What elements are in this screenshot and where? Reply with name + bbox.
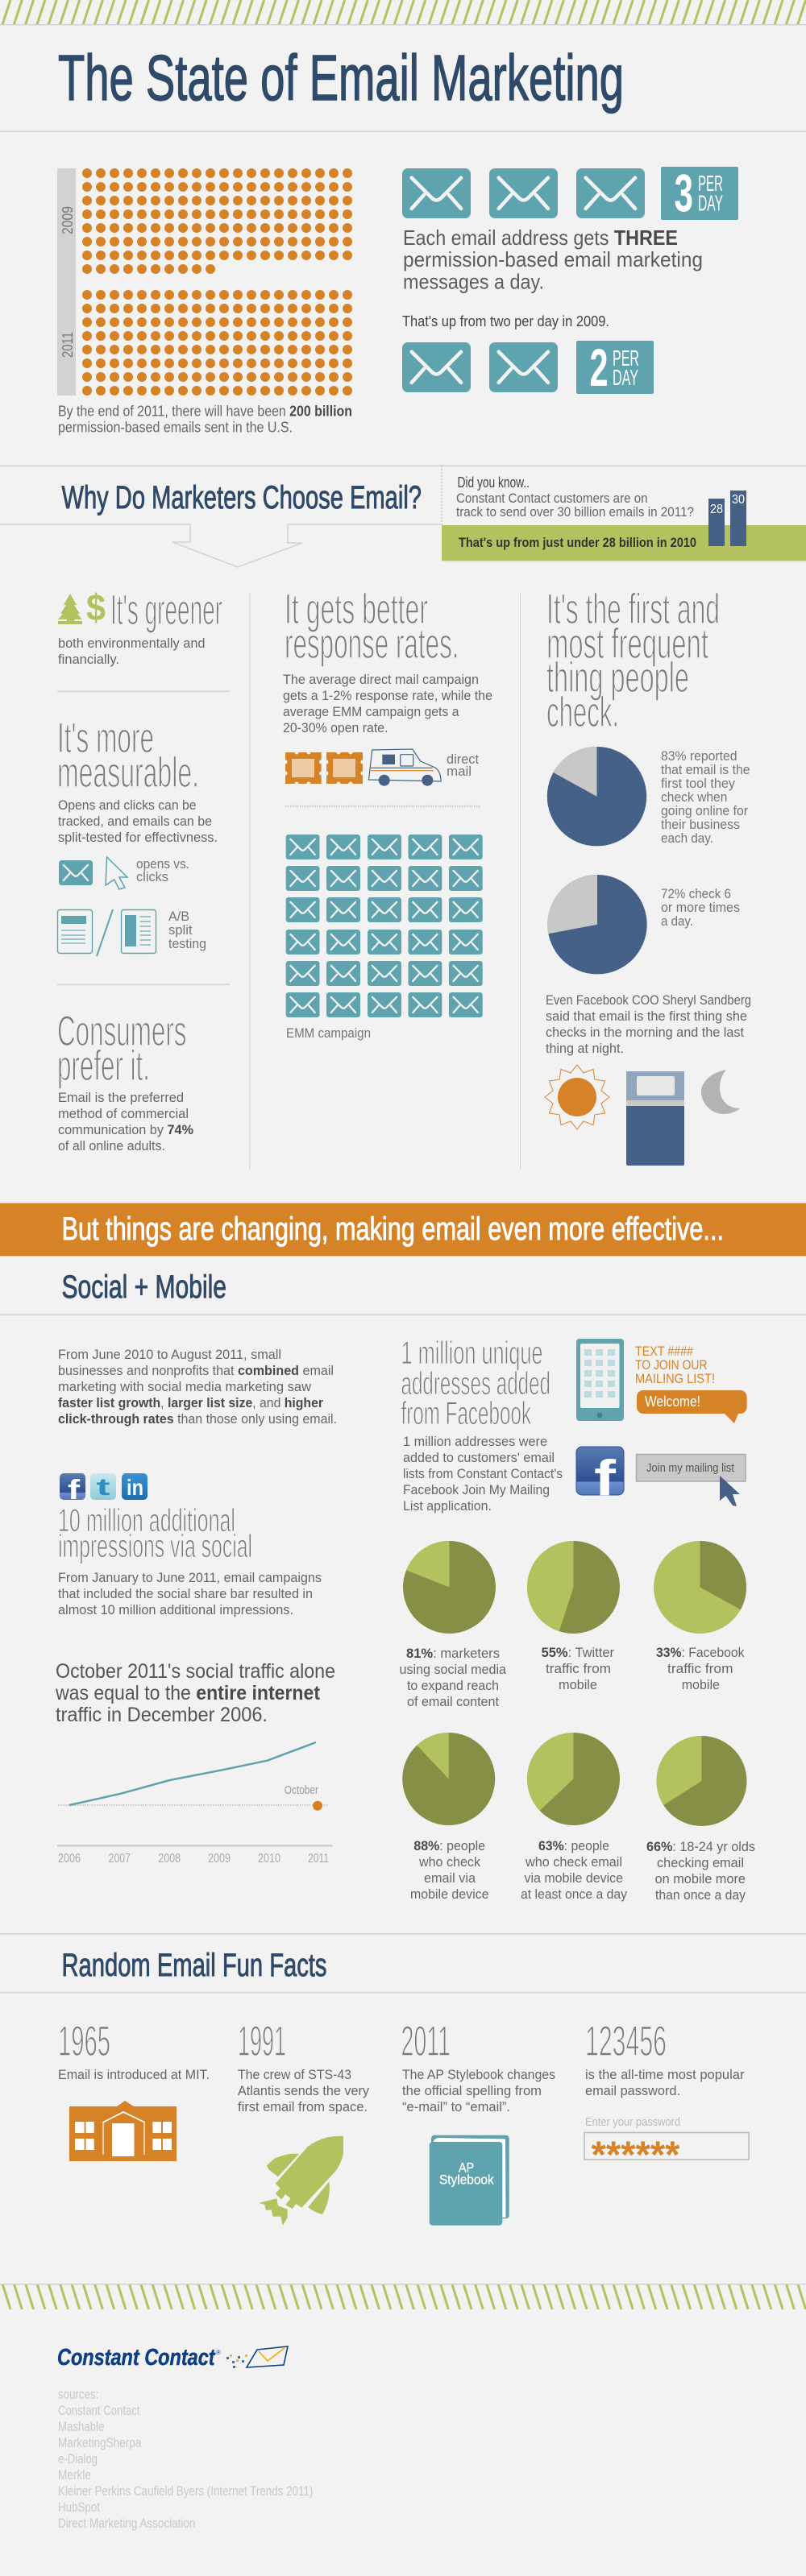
text: combined marketing: From June 2010 to August 2011, small bbox=[58, 1347, 281, 1362]
text: sources: Direct Marketing Association bbox=[58, 2516, 195, 2531]
label: direct mail: direct bbox=[447, 752, 479, 767]
text: response body: average EMM campaign gets a bbox=[283, 704, 459, 719]
icon: ap stylebook: Stylebook bbox=[439, 2172, 494, 2188]
label: 63%: at least once a day bbox=[521, 1886, 627, 1902]
label: 88%: mobile device bbox=[410, 1886, 488, 1902]
panel: fact 2011: “e-mail” to “email”. bbox=[402, 2099, 510, 2114]
label: direct mail bbox=[447, 752, 479, 779]
text: 1 million addresses body: Facebook Join My Mailing bbox=[403, 1482, 550, 1497]
text: text to join: TO JOIN OUR bbox=[635, 1357, 708, 1373]
panel: fact 2011: The AP Stylebook changes bbox=[402, 2067, 555, 2082]
text: measurable body bbox=[58, 797, 218, 845]
text: sources: MarketingSherpa bbox=[58, 2435, 142, 2450]
panel: fact 123456: email password. bbox=[585, 2083, 680, 2098]
text: measurable body: split-tested for effectivness. bbox=[58, 830, 218, 845]
heading: it's more measurable bbox=[57, 714, 199, 797]
text: response body: The average direct mail campaign bbox=[283, 672, 479, 687]
panel: fact 1991: first email from space. bbox=[238, 2099, 368, 2114]
heading: random email fun facts: Random Email Fun Facts bbox=[61, 1948, 327, 1983]
text: 83% reported: that email is the bbox=[661, 762, 750, 777]
label: 55%: mobile bbox=[559, 1677, 597, 1692]
panel: fact 123456: is the all-time most popular bbox=[585, 2067, 745, 2082]
text: sources: Merkle bbox=[58, 2467, 91, 2483]
heading: it's more measurable: measurable. bbox=[57, 749, 199, 797]
panel: fact 1991: The crew of STS-43 bbox=[238, 2067, 351, 2082]
text: consumers body: method of commercial bbox=[58, 1106, 189, 1121]
password input bbox=[584, 2133, 749, 2176]
text: 83% reported: first tool they bbox=[661, 776, 735, 791]
text: text to join: MAILING LIST! bbox=[635, 1371, 715, 1386]
panel: it's more measurable bbox=[57, 714, 218, 956]
text: response body: gets a 1-2% response rate, while the bbox=[283, 688, 492, 703]
label: 81% bbox=[400, 1646, 507, 1709]
text: sources: e-Dialog bbox=[58, 2451, 98, 2466]
label: 33%: mobile bbox=[682, 1677, 720, 1692]
icon: moon bbox=[701, 1070, 740, 1114]
label: 33%: traffic from bbox=[667, 1661, 733, 1676]
text: three messages a day: Each email address gets THREE bbox=[403, 226, 678, 250]
logo: constant contact: ® bbox=[216, 2349, 221, 2356]
label: opens vs clicks bbox=[136, 856, 189, 884]
icon: facebook bbox=[576, 1447, 624, 1506]
text: 1 million addresses body: 1 million addresses were bbox=[403, 1434, 547, 1449]
label: 63%: 63%: people bbox=[538, 1838, 609, 1853]
callout: did you know: 28 bbox=[710, 503, 723, 516]
icon: device bbox=[626, 1071, 684, 1166]
heading: 10 million impressions bbox=[58, 1503, 252, 1564]
heading: 10 million impressions: 10 million additional bbox=[58, 1503, 235, 1539]
label: 63% bbox=[521, 1838, 627, 1902]
panel: fact 1965: 1965 bbox=[58, 2018, 110, 2065]
pie chart: 63% once a day bbox=[527, 1733, 620, 1825]
label: emm campaign: EMM campaign bbox=[286, 1025, 371, 1041]
text: sheryl sandberg: checks in the morning and the last bbox=[546, 1025, 744, 1040]
callout: welcome bubble: Welcome! bbox=[645, 1394, 700, 1410]
label: 63%: via mobile device bbox=[524, 1870, 623, 1886]
text: 72% check bbox=[661, 886, 740, 929]
panel: fact 1965: Email is introduced at MIT. bbox=[58, 2067, 210, 2082]
label: 88% bbox=[410, 1838, 488, 1902]
text: three messages a day bbox=[403, 226, 703, 293]
text: sources: HubSpot bbox=[58, 2499, 100, 2515]
label: a/b split testing: testing bbox=[168, 936, 206, 951]
callout: did you know: Constant Contact customers are on bbox=[456, 491, 648, 506]
label: opens vs clicks: clicks bbox=[136, 869, 168, 884]
text: consumers body: Email is the preferred bbox=[58, 1090, 184, 1105]
text: social share bar: From January to June 2011, email campaigns bbox=[58, 1570, 322, 1585]
callout: did you know bbox=[442, 474, 806, 562]
heading: 10 million impressions: impressions via social bbox=[58, 1529, 252, 1564]
text: consumers body: of all online adults. bbox=[58, 1138, 165, 1153]
heading: better response rates bbox=[285, 586, 459, 668]
icons: social networks bbox=[60, 1473, 147, 1505]
icon: sun bbox=[545, 1065, 609, 1129]
text: 1 million addresses body: lists from Constant Contact's bbox=[403, 1466, 563, 1481]
pie chart: 55% twitter bbox=[527, 1541, 620, 1634]
line chart: social traffic 2006-2011 bbox=[57, 1742, 333, 1866]
label: 66%: 66%: 18-24 yr olds bbox=[646, 1839, 755, 1854]
text: 72% check: 72% check 6 bbox=[661, 886, 731, 901]
icon: rocket bbox=[259, 2136, 343, 2226]
icon: ap stylebook bbox=[430, 2135, 509, 2226]
panel: fact 2011: 2011 bbox=[401, 2018, 451, 2065]
heading: consumers prefer it: Consumers bbox=[57, 1008, 187, 1055]
panel: fact 123456 bbox=[584, 2018, 749, 2176]
caption: 200 billion: By the end of 2011, there will have been 200 billion bbox=[58, 403, 352, 419]
heading: first and most frequent bbox=[546, 586, 720, 736]
heading: 1 million addresses from facebook bbox=[401, 1336, 550, 1431]
text: measurable body: tracked, and emails can be bbox=[58, 814, 212, 829]
heading: social + mobile: Social + Mobile bbox=[61, 1269, 226, 1305]
caption: 200 billion bbox=[58, 403, 352, 435]
button: join my mailing list bbox=[637, 1455, 746, 1481]
label: 33%: 33%: Facebook bbox=[656, 1645, 745, 1660]
icon grid: emm campaign envelopes bbox=[286, 835, 483, 1017]
icon: mail truck bbox=[369, 749, 441, 786]
heading: why do marketers choose email: Why Do Marketers Choose Email? bbox=[61, 480, 422, 516]
heading: better response rates: It gets better bbox=[285, 586, 428, 633]
text: 83% reported: going online for bbox=[661, 803, 748, 818]
text: combined marketing: businesses and nonprofits that combined email bbox=[58, 1363, 334, 1378]
label: 88%: 88%: people bbox=[413, 1838, 485, 1853]
icons: social networks: f bbox=[68, 1475, 81, 1505]
text: sources: Constant Contact bbox=[58, 2403, 140, 2418]
password input: ****** bbox=[592, 2133, 680, 2176]
text: 1 million addresses body bbox=[403, 1434, 563, 1514]
text: consumers body bbox=[58, 1090, 193, 1153]
text: sources bbox=[58, 2387, 313, 2531]
icon: stamps bbox=[284, 751, 364, 786]
text: sources: sources: bbox=[58, 2387, 98, 2402]
callout: did you know: 30 bbox=[732, 493, 745, 507]
text: october 2011 traffic: October 2011's social traffic alone bbox=[56, 1660, 335, 1683]
text: sources: Mashable bbox=[58, 2419, 105, 2434]
text: social share bar: almost 10 million additional impressions. bbox=[58, 1602, 293, 1617]
icons: social networks: in bbox=[127, 1475, 143, 1500]
text: measurable body: Opens and clicks can be bbox=[58, 797, 197, 813]
label: 81%: 81%: marketers bbox=[406, 1646, 500, 1661]
pie chart: 66% 18-24 yr olds bbox=[656, 1736, 746, 1826]
text: greener body: both environmentally and bbox=[58, 636, 205, 651]
callout: did you know: That's up from just under 28 billion in 2010 bbox=[459, 535, 696, 550]
text: consumers body: communication by 74% bbox=[58, 1122, 193, 1137]
panel: fact 123456: 123456 bbox=[585, 2018, 667, 2065]
callout: did you know: track to send over 30 billion emails in 2011? bbox=[456, 504, 694, 520]
icon: dollar: $ bbox=[86, 586, 106, 628]
heading: it's greener: It's greener bbox=[110, 586, 222, 634]
line chart: social traffic 2006-2011: 2009 bbox=[208, 1852, 231, 1866]
text: greener body: financially. bbox=[58, 652, 119, 667]
label: 88%: who check bbox=[418, 1854, 480, 1870]
pie chart: 83% bbox=[547, 747, 646, 846]
icons: three emails per day: DAY bbox=[698, 190, 723, 216]
icon: ap stylebook: AP bbox=[459, 2160, 474, 2176]
line chart: social traffic 2006-2011: October bbox=[285, 1783, 318, 1797]
icon: a/b split pages bbox=[58, 909, 156, 956]
label: direct mail: mail bbox=[447, 764, 472, 779]
icon: cursor outline bbox=[106, 857, 127, 889]
panel: consumers prefer it bbox=[57, 1008, 193, 1153]
icon: phone bbox=[576, 1339, 624, 1421]
label: 55% bbox=[542, 1645, 614, 1692]
heading: first and most frequent: most frequent bbox=[546, 620, 708, 668]
label: a/b split testing: A/B bbox=[168, 909, 189, 924]
icon: building bbox=[69, 2101, 177, 2161]
text: 83% reported: each day. bbox=[661, 830, 713, 846]
text: combined marketing: click-through rates than those only using email. bbox=[58, 1411, 337, 1427]
panel: fact 1991: 1991 bbox=[238, 2018, 286, 2065]
panel: fact 2011: the official spelling from bbox=[402, 2083, 542, 2098]
text: response body bbox=[283, 672, 492, 735]
panel: first and most frequent bbox=[545, 586, 751, 1166]
icons: three emails per day: 3 bbox=[674, 163, 693, 222]
text: sheryl sandberg: Even Facebook COO Sheryl Sandberg bbox=[546, 992, 751, 1008]
logo: constant contact: Constant Contact bbox=[57, 2345, 216, 2371]
label: a/b split testing bbox=[168, 909, 206, 951]
text: sheryl sandberg bbox=[546, 992, 751, 1056]
label: 66%: checking email bbox=[657, 1855, 744, 1870]
label: 63%: who check email bbox=[525, 1854, 622, 1870]
callout: welcome bubble bbox=[637, 1390, 747, 1423]
chart: 200 billion emails dot grid: 2011 bbox=[60, 332, 76, 358]
text: sources: Kleiner Perkins Caufield Byers (Internet Trends 2011) bbox=[58, 2483, 313, 2499]
text: october 2011 traffic: was equal to the entire internet bbox=[55, 1682, 321, 1704]
text: october 2011 traffic bbox=[55, 1660, 335, 1726]
text: combined marketing bbox=[58, 1347, 337, 1427]
icons: two emails per day: DAY bbox=[613, 365, 638, 390]
panel: fact 1965 bbox=[58, 2018, 210, 2161]
icons: social networks: t bbox=[97, 1474, 110, 1501]
panel: it's greener bbox=[58, 586, 222, 667]
label: 88%: email via bbox=[424, 1870, 476, 1886]
pie chart: 33% facebook bbox=[654, 1541, 746, 1634]
panel: better response rates bbox=[283, 586, 492, 1041]
heading: consumers prefer it: prefer it. bbox=[57, 1042, 150, 1090]
label: a/b split testing: split bbox=[168, 922, 193, 938]
icons: three emails per day bbox=[402, 163, 738, 222]
banner: things are changing bbox=[0, 1203, 806, 1257]
icons: three emails per day: PER bbox=[698, 171, 723, 196]
text: 1 million addresses body: List application. bbox=[403, 1498, 492, 1514]
text: sheryl sandberg: thing at night. bbox=[546, 1041, 624, 1056]
label: 66%: on mobile more bbox=[654, 1871, 746, 1886]
label: 33% bbox=[656, 1645, 745, 1692]
label: 81%: using social media bbox=[400, 1662, 507, 1677]
text: combined marketing: marketing with social media marketing saw bbox=[58, 1379, 312, 1394]
icon: tree bbox=[58, 594, 82, 624]
heading: 1 million addresses from facebook: 1 million unique bbox=[401, 1336, 543, 1371]
label: 66%: than once a day bbox=[655, 1887, 746, 1903]
line chart: social traffic 2006-2011: 2010 bbox=[258, 1852, 280, 1866]
pie chart: 81% marketers bbox=[403, 1541, 496, 1634]
text: response body: 20-30% open rate. bbox=[283, 720, 388, 735]
text: 83% reported bbox=[661, 748, 750, 846]
panel: fact 2011 bbox=[401, 2018, 555, 2226]
icon: cursor bbox=[720, 1476, 740, 1506]
text: three messages a day: messages a day. bbox=[403, 269, 544, 293]
heading: first and most frequent: thing people bbox=[546, 654, 689, 702]
heading: it's more measurable: It's more bbox=[57, 714, 154, 762]
text: three messages a day: permission-based email marketing bbox=[403, 247, 703, 271]
icons: two emails per day bbox=[402, 338, 654, 397]
pie chart: 72% bbox=[547, 875, 647, 974]
text: 1 million addresses body: added to customers' email bbox=[403, 1450, 555, 1465]
text: 83% reported: their business bbox=[661, 817, 740, 832]
panel: fact 1991 bbox=[238, 2018, 369, 2226]
text: social share bar bbox=[58, 1570, 322, 1617]
heading: first and most frequent: check. bbox=[546, 689, 619, 736]
label: 81%: of email content bbox=[407, 1694, 499, 1709]
chart: 200 billion emails dot grid bbox=[57, 168, 352, 396]
text: text to join: TEXT #### bbox=[635, 1344, 693, 1359]
panel: fact 1991: Atlantis sends the very bbox=[238, 2083, 369, 2098]
text: up from two per day: That's up from two per day in 2009. bbox=[402, 313, 609, 329]
text: 72% check: a day. bbox=[661, 913, 693, 929]
text: 83% reported: check when bbox=[661, 789, 727, 805]
text: 72% check: or more times bbox=[661, 900, 740, 915]
label: 55%: 55%: Twitter bbox=[542, 1645, 614, 1660]
chart: 200 billion emails dot grid: 2009 bbox=[60, 206, 76, 234]
label: 66% bbox=[646, 1839, 755, 1903]
line chart: social traffic 2006-2011: 2008 bbox=[158, 1852, 181, 1866]
icons: two emails per day: 2 bbox=[590, 338, 608, 397]
icon: facebook: f bbox=[594, 1451, 616, 1506]
label: opens vs clicks: opens vs. bbox=[136, 856, 189, 872]
heading: 1 million addresses from facebook: from Facebook bbox=[401, 1396, 532, 1431]
line chart: social traffic 2006-2011: 2011 bbox=[308, 1852, 329, 1866]
text: greener body bbox=[58, 636, 205, 667]
line chart: social traffic 2006-2011: 2006 bbox=[58, 1852, 81, 1866]
line chart: social traffic 2006-2011: 2007 bbox=[109, 1852, 131, 1866]
text: 83% reported: 83% reported bbox=[661, 748, 737, 764]
text: october 2011 traffic: traffic in December 2006. bbox=[56, 1704, 268, 1726]
caption: 200 billion: permission-based emails sent in the U.S. bbox=[58, 419, 293, 435]
callout: did you know: Did you know.. bbox=[458, 474, 530, 491]
arrow: outline pointing down bbox=[0, 524, 442, 567]
heading: better response rates: response rates. bbox=[285, 620, 459, 668]
label: 81%: to expand reach bbox=[407, 1678, 499, 1693]
text: social share bar: that included the social share bar resulted in bbox=[58, 1586, 313, 1601]
icon: envelope small bbox=[59, 860, 93, 885]
heading: consumers prefer it bbox=[57, 1008, 187, 1090]
text: sheryl sandberg: said that email is the first thing she bbox=[546, 1008, 747, 1024]
heading: 1 million addresses from facebook: addresses added bbox=[401, 1366, 550, 1402]
button: join my mailing list: Join my mailing list bbox=[646, 1461, 735, 1475]
icons: two emails per day: PER bbox=[613, 346, 639, 371]
text: combined marketing: faster list growth, larger list size, and higher bbox=[58, 1395, 323, 1410]
label: 55%: traffic from bbox=[546, 1661, 611, 1676]
panel: fact 123456: Enter your password bbox=[585, 2115, 680, 2129]
text: text to join bbox=[635, 1344, 715, 1386]
pie chart: 88% mobile device bbox=[402, 1733, 495, 1825]
